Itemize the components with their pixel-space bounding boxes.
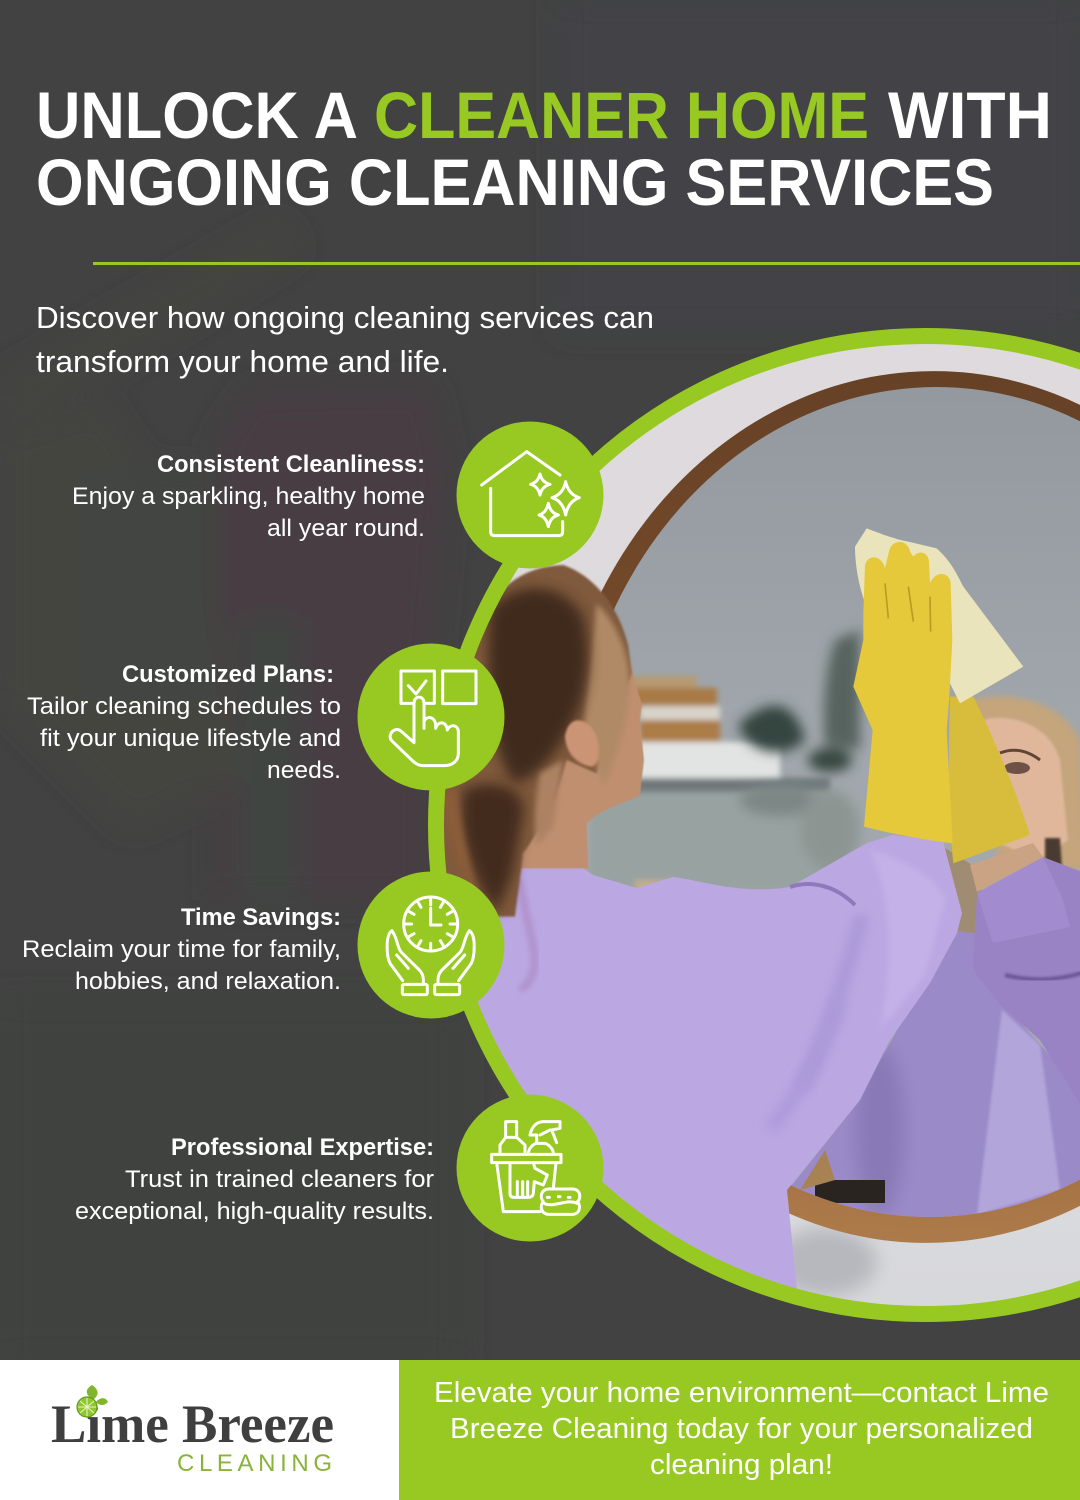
icon: clock in hands (358, 872, 504, 1018)
sweatshirt (465, 835, 962, 1300)
footer call to action: cleaning plan! (650, 1449, 833, 1481)
benefit text: professional expertise: exceptional, high-quality results. (75, 1198, 434, 1225)
icon: cleaning supplies bucket (456, 1094, 604, 1242)
benefit text: time savings: hobbies, and relaxation. (75, 968, 341, 995)
photo: woman cleaning round mirror (420, 320, 1080, 1330)
subtitle: transform your home and life. (36, 344, 449, 379)
reflection: woman (780, 696, 1080, 1230)
benefit text: time savings: Time Savings: (181, 904, 341, 931)
subtitle: Discover how ongoing cleaning services can (36, 300, 654, 335)
logo tagline: CLEANING (177, 1450, 332, 1477)
benefit text: time savings (22, 904, 341, 995)
icon: house with sparkles (456, 422, 604, 568)
subtitle (36, 300, 654, 379)
footer logo panel (0, 1360, 399, 1500)
icon: lime slice with leaves (77, 1385, 108, 1417)
green ring (436, 336, 1080, 1314)
footer call to action: Elevate your home environment—contact Lime (434, 1377, 1049, 1409)
benefit text: customized plans: needs. (267, 757, 341, 784)
gloves and cloth (853, 528, 1030, 863)
benefit text: consistent cleanliness: Consistent Cleanliness: (157, 451, 425, 478)
benefit text: consistent cleanliness: all year round. (267, 515, 425, 542)
benefit text: consistent cleanliness: Enjoy a sparkling, healthy home (72, 483, 425, 510)
logo wordmark: Lime Breeze (51, 1394, 334, 1454)
footer call to action: Breeze Cleaning today for your personalized (450, 1413, 1033, 1445)
benefit text: customized plans: Tailor cleaning schedules to (27, 693, 341, 720)
mirror base details (800, 1150, 885, 1203)
icon: hand selecting checkbox (358, 644, 504, 790)
benefit text: customized plans: fit your unique lifestyle and (40, 725, 341, 752)
title: ONGOING CLEANING SERVICES (36, 145, 994, 219)
title (36, 78, 1052, 219)
title: WITH (888, 78, 1052, 152)
benefit text: professional expertise: Professional Expertise: (171, 1134, 434, 1161)
head and ponytail (440, 565, 644, 917)
benefit text: customized plans: Customized Plans: (122, 661, 334, 688)
benefit text: professional expertise: Trust in trained cleaners for (125, 1166, 434, 1193)
benefit text: time savings: Reclaim your time for family, (22, 936, 341, 963)
benefit text: consistent cleanliness (72, 451, 425, 542)
footer call to action (399, 1360, 1080, 1500)
benefit text: customized plans (27, 661, 341, 784)
title: CLEANER HOME (374, 78, 869, 152)
title: UNLOCK A (36, 78, 358, 152)
benefit text: professional expertise (75, 1134, 434, 1225)
